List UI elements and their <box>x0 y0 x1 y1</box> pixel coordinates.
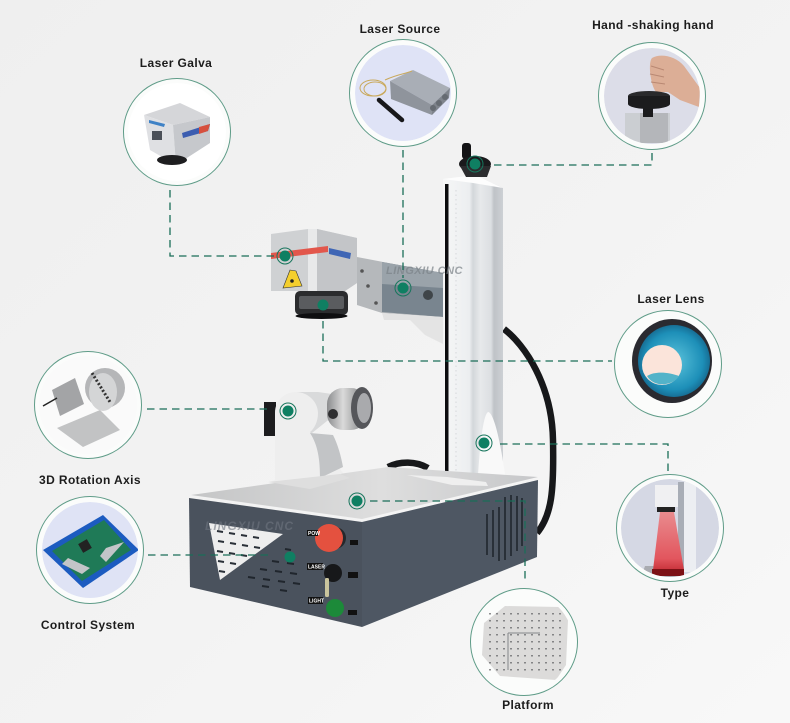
lens barrel <box>295 291 348 319</box>
panel: platform <box>470 588 578 712</box>
connector: type <box>500 444 668 472</box>
watermark: LINGXIU CNC <box>386 265 464 277</box>
connector: 3D rotation axis <box>147 408 272 410</box>
panel: hand-shaking hand <box>592 18 714 150</box>
hand wheel <box>459 143 491 177</box>
column <box>443 175 503 477</box>
panel: type <box>616 474 724 600</box>
galvo head <box>271 229 357 291</box>
connector: platform <box>370 501 525 581</box>
heading: 3D rotation axis: 3D Rotation Axis <box>39 473 141 487</box>
power cable <box>388 329 553 533</box>
heading: control system: Control System <box>41 618 135 632</box>
panel: laser galva <box>124 56 230 186</box>
panel: laser lens <box>614 292 722 418</box>
control buttons: LASER <box>308 564 325 570</box>
vent grille <box>487 495 522 561</box>
heading: hand-shaking hand: Hand -shaking hand <box>592 18 714 32</box>
panel: control system <box>36 496 144 632</box>
housing top <box>191 467 538 519</box>
control buttons: LIGHT <box>309 598 324 604</box>
connector: hand-shaking hand <box>494 152 652 165</box>
heading: laser galva: Laser Galva <box>140 56 212 70</box>
box watermark: LINGXIU CNC <box>205 519 294 533</box>
heading: type: Type <box>661 586 689 600</box>
panel: laser source <box>350 22 456 146</box>
heading: laser lens: Laser Lens <box>637 292 705 306</box>
panel: 3D rotation axis <box>34 352 142 487</box>
heading: laser source: Laser Source <box>360 22 440 36</box>
column foot <box>478 412 505 475</box>
housing right face <box>362 480 538 627</box>
arm bracket <box>357 257 464 344</box>
triangular vent panel <box>205 519 300 591</box>
connector: control system <box>148 554 272 556</box>
rotary axis <box>264 387 373 489</box>
control buttons: POW <box>308 531 320 537</box>
control buttons <box>307 524 358 617</box>
machine illustration <box>189 143 553 627</box>
connector: laser galva <box>170 190 276 256</box>
marker dots <box>277 156 492 562</box>
connector: laser lens <box>323 321 612 361</box>
housing front face <box>189 498 362 627</box>
connector: laser source <box>402 150 404 278</box>
heading: platform: Platform <box>502 698 554 712</box>
